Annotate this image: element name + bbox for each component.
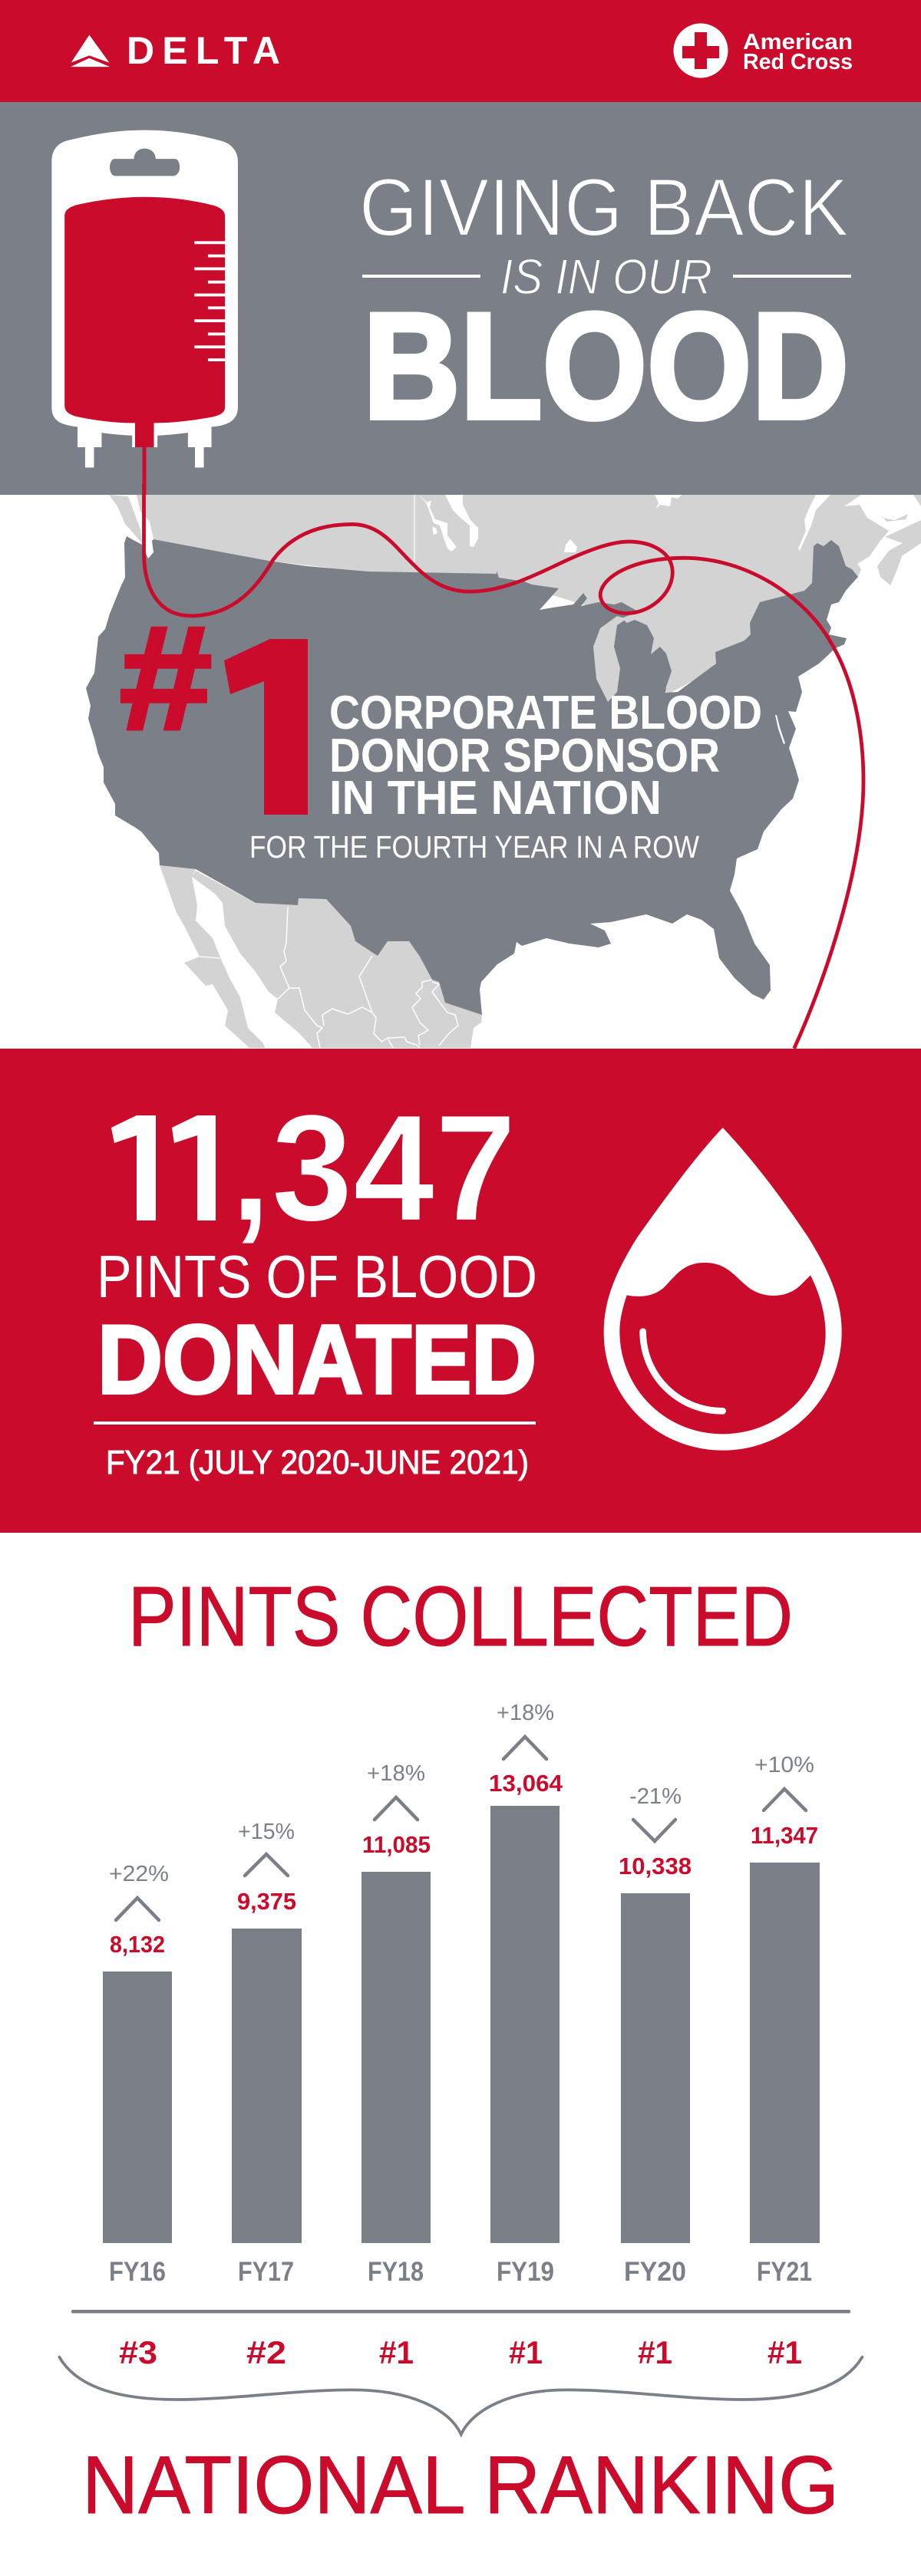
bar FY18: [361, 1761, 431, 2287]
rankings row: #1: [638, 2334, 672, 2370]
heading: national ranking: NATIONAL RANKING: [82, 2439, 839, 2531]
title: [359, 161, 851, 450]
bar FY16: +22%: [109, 1862, 169, 1886]
Canada: [137, 495, 889, 694]
bar FY20: 10,338: [619, 1853, 692, 1879]
big number: 1: [97, 1083, 172, 1253]
title: BLOOD: [363, 282, 849, 450]
sponsor statement: FOR THE FOURTH YEAR IN A ROW: [249, 829, 699, 865]
Baja California: [160, 865, 265, 1048]
Mexico mainland: [192, 871, 482, 1048]
bar FY21: +10%: [754, 1753, 814, 1777]
bar FY19: FY19: [497, 2257, 554, 2287]
hero panel: [0, 102, 921, 495]
sponsor statement: IN THE NATION: [329, 772, 662, 825]
number one badge: 1: [200, 584, 342, 869]
bar FY21: FY21: [757, 2257, 812, 2287]
American Red Cross logo: Red Cross: [743, 50, 853, 74]
big number: 1: [157, 1083, 233, 1253]
big number: ,347: [230, 1083, 517, 1253]
bar FY21: [750, 1753, 820, 2287]
sponsor statement: [249, 687, 762, 865]
title: GIVING BACK: [359, 161, 849, 253]
curly brace: [59, 2357, 862, 2434]
Delta logo: DELTA: [127, 29, 280, 72]
lakes and St Lawrence: [418, 495, 830, 552]
icon: blood drop: [604, 1128, 842, 1451]
label: PINTS OF BLOOD: [97, 1243, 537, 1310]
American Red Cross logo: [674, 23, 853, 78]
bar FY17: +15%: [238, 1820, 295, 1844]
United States: [86, 536, 858, 1015]
American Red Cross logo: American: [743, 30, 853, 54]
bar FY21: 11,347: [751, 1822, 818, 1849]
fiscal year note: FY21 (JULY 2020-JUNE 2021): [106, 1444, 529, 1481]
bar FY18: +18%: [367, 1761, 425, 1786]
bar FY20: [619, 1784, 692, 2287]
label bold: DONATED: [97, 1305, 536, 1414]
bar FY20: -21%: [629, 1784, 682, 1809]
bar FY19: 13,064: [489, 1770, 563, 1797]
heading: pints collected: PINTS COLLECTED: [128, 1570, 793, 1664]
bar FY17: [232, 1820, 302, 2287]
Chesapeake Bay: [775, 715, 785, 744]
Vancouver Island: [109, 495, 142, 543]
bar chart: [103, 1701, 820, 2287]
bar FY16: FY16: [109, 2257, 166, 2287]
bar FY20: FY20: [624, 2257, 686, 2287]
title: IS IN OUR: [500, 249, 712, 305]
sponsor statement: CORPORATE BLOOD: [329, 687, 762, 740]
bag tube: [143, 447, 146, 495]
Nova Scotia: [877, 520, 921, 585]
bar FY18: 11,085: [362, 1831, 431, 1858]
rankings row: #1: [509, 2334, 543, 2370]
icon: blood bag: [51, 130, 238, 467]
rankings row: #1: [379, 2334, 414, 2370]
header band: [0, 0, 921, 102]
bar FY19: [489, 1701, 563, 2287]
bar FY17: FY17: [238, 2257, 294, 2287]
bar FY17: 9,375: [237, 1888, 296, 1915]
number one badge: [120, 626, 308, 815]
Mexican state borders: [278, 907, 458, 1048]
big number: [111, 1115, 510, 1243]
panel: pints donated: [0, 1049, 921, 1533]
rankings row: #2: [246, 2334, 286, 2370]
bar FY16: 8,132: [110, 1931, 165, 1958]
number one badge: #: [120, 595, 212, 760]
Lake Michigan: [593, 616, 643, 702]
map landmasses: [86, 495, 921, 1048]
bar FY16: [103, 1862, 172, 2287]
sponsor statement: DONOR SPONSOR: [329, 730, 720, 782]
rankings row: #1: [768, 2334, 802, 2370]
bar FY19: +18%: [497, 1701, 554, 1725]
rankings row: #3: [119, 2334, 157, 2370]
blood line route: [144, 484, 863, 1049]
bar FY18: FY18: [368, 2257, 424, 2287]
panel: map of North America: [86, 447, 921, 1049]
rankings row: [119, 2334, 802, 2370]
